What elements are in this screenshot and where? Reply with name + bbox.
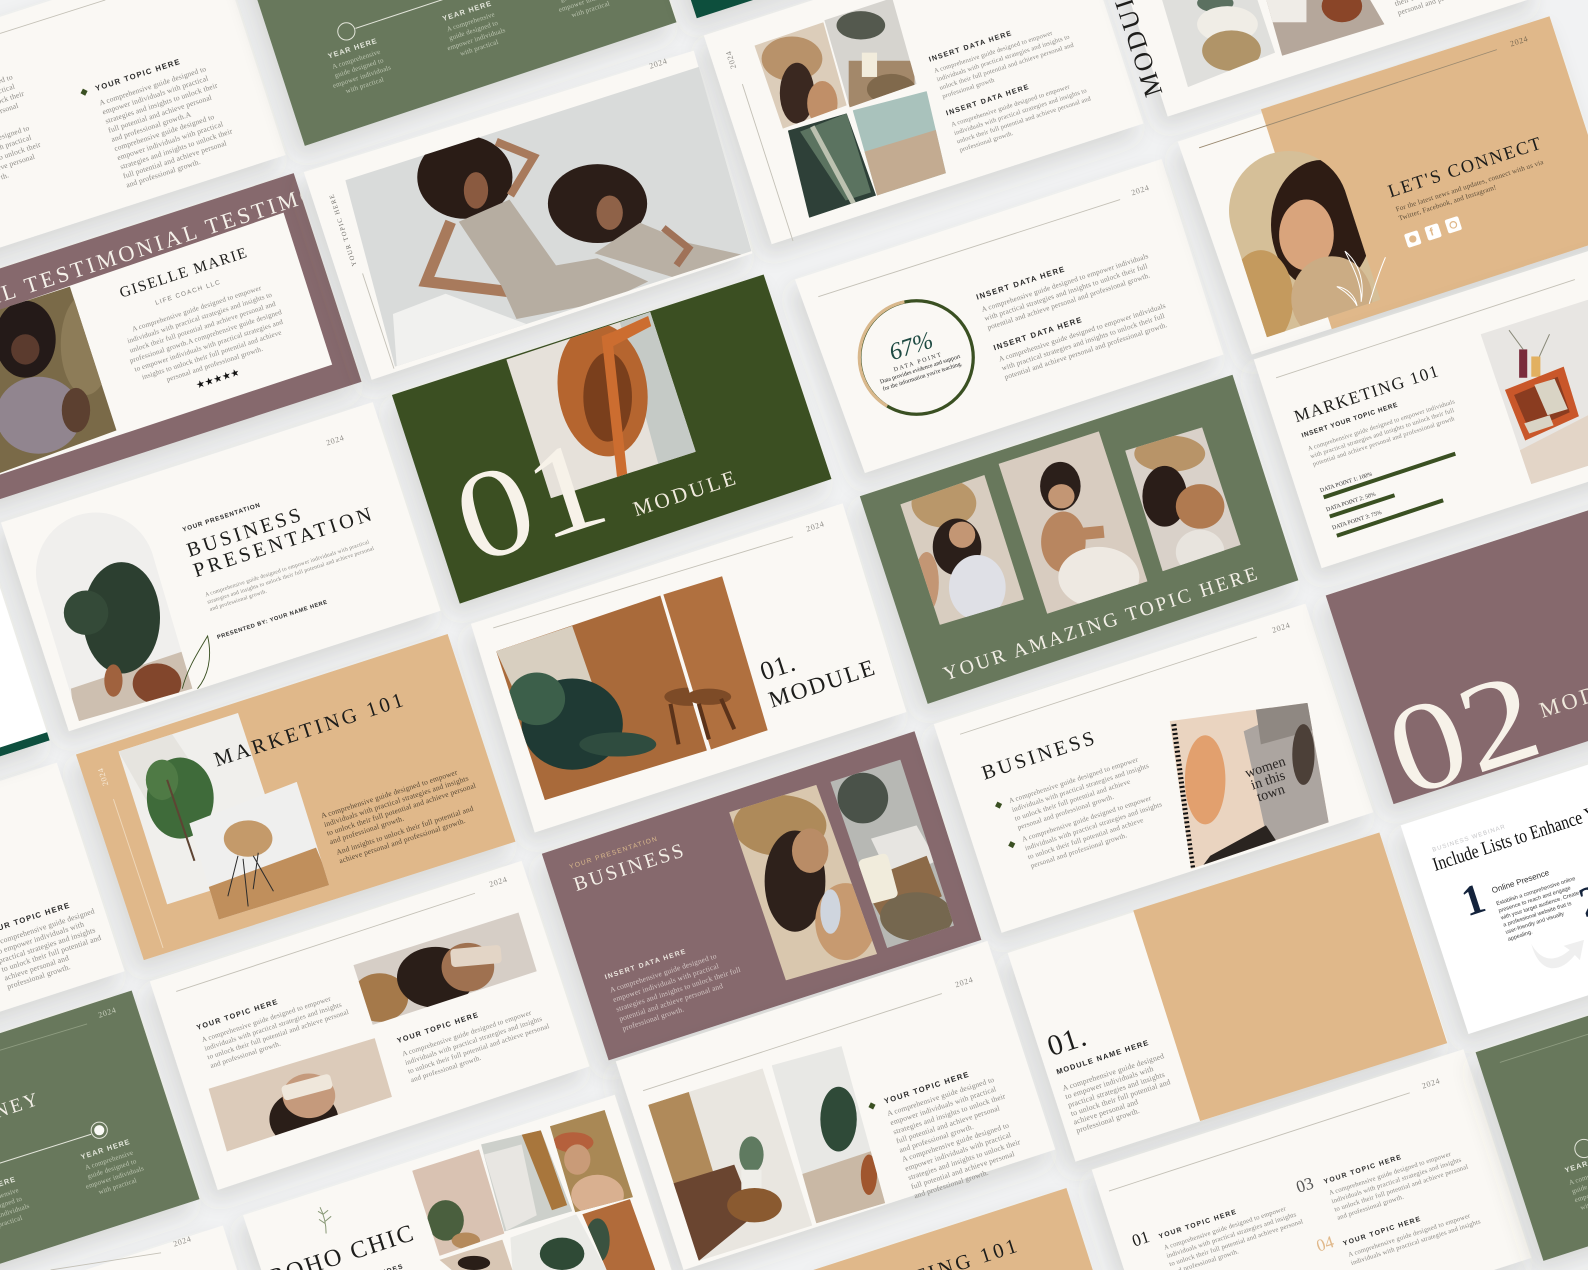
- text block: A comprehensive guide designed to empower: [1347, 1213, 1471, 1259]
- text block: user-friendly and visually: [1505, 911, 1565, 936]
- text block: connect: For the latest news and updates, connect with us via: [1395, 158, 1545, 214]
- subheading: Online Presence: [1491, 868, 1551, 895]
- text block: achieve personal and: [1072, 1097, 1139, 1127]
- timeline node: [1575, 1139, 1588, 1158]
- text block: A comprehensive guide designed to empower: [1163, 1205, 1287, 1252]
- text block: strategies and insights to unlock their: [907, 1137, 1022, 1182]
- text block: year one: empower individuals: [332, 64, 392, 90]
- text block: paragraph one: and professional growth.: [328, 814, 405, 846]
- text block: potential and achieve personal and: [618, 981, 724, 1023]
- text block: individuals with practical strategies and insights: [204, 1001, 343, 1053]
- panel: white slide with teal strip: [0, 532, 50, 861]
- text block: testimonial: professional growth.A comprehensive guide designed: [129, 308, 283, 365]
- text block: practical strategies and insights: [0, 925, 97, 965]
- icon: sprig: [318, 1207, 331, 1234]
- year: 2024: [1130, 183, 1151, 197]
- text block: year: guide designed to: [87, 1158, 138, 1181]
- text block: appealing.: [1507, 929, 1534, 943]
- text block: year two: A comprehensive: [446, 11, 496, 33]
- text block: right column: full potential and achieve personal: [122, 138, 228, 180]
- number 03: 03: [1294, 1173, 1316, 1197]
- title: BUSINESS: [184, 503, 307, 562]
- text block: empower individuals with practical: [612, 961, 720, 1004]
- text block: individuals with practical strategies and insights: [1331, 1156, 1463, 1205]
- text block: testimonial: to empower individuals with practical strategies and: [133, 318, 284, 374]
- heading: number: 01.: [757, 648, 800, 686]
- heading: insert data one: INSERT DATA HERE: [975, 264, 1067, 302]
- text block: data caption: for the information you're teaching.: [882, 360, 964, 393]
- icon: bullet: [868, 1102, 876, 1109]
- heading: insert data two: INSERT DATA HERE: [992, 315, 1084, 352]
- photo: sea: [852, 91, 946, 196]
- presenter: PRESENTED BY: YOUR NAME HERE: [217, 599, 329, 641]
- text block: strategies and insights to unlock their: [892, 1091, 1007, 1136]
- photo: basket plant: [1162, 0, 1275, 87]
- text block: insert data one: A comprehensive guide designed to empower individuals: [981, 252, 1150, 314]
- text block: A comprehensive guide designed to: [901, 1121, 1010, 1164]
- text block: insert data one: potential and achieve personal and professional growth.: [986, 271, 1151, 332]
- panel: four photos slide: [704, 0, 1143, 244]
- photo: rattan chair: [190, 782, 329, 920]
- text block: to unlock their full potential and: [0, 933, 102, 974]
- text block: professional growth.: [1075, 1106, 1141, 1135]
- text block: professional growth.: [6, 962, 72, 991]
- stat: 67 percent: 67%: [886, 327, 937, 366]
- subheading: role: LIFE COACH LLC: [154, 279, 222, 307]
- year: 2024: [648, 56, 669, 71]
- photo: sofa and basket: [643, 1063, 820, 1266]
- text block: A comprehensive guide designed to: [609, 951, 718, 994]
- text block: to unlock their full potential and achieve: [1027, 816, 1145, 861]
- text block: and professional growth.: [1336, 1194, 1405, 1222]
- text block: A comprehensive guide designed to empower: [201, 995, 332, 1044]
- panel: two women slide: [304, 51, 760, 380]
- panel: data point slide: [795, 159, 1223, 473]
- text block: insert data two: with practical strategies and insights to unlock their full: [1001, 312, 1166, 372]
- text block: Establish a comprehensive online: [1496, 876, 1576, 907]
- year: 2024: [954, 975, 974, 989]
- heading: YOUR TOPIC HERE: [1342, 1216, 1422, 1248]
- icon: bullet: [1008, 841, 1015, 848]
- eyebrow: YOUR PRESENTATION: [182, 502, 262, 534]
- text block: individuals with practical strategies and insights: [1011, 762, 1150, 814]
- text block: year one: with practical: [345, 76, 385, 95]
- panel: module 01 slide: [392, 274, 831, 604]
- bar labels: DATA POINT 1: 100%: [1319, 471, 1373, 494]
- text block: right column: and professional growth.A: [110, 109, 193, 144]
- photo: fig plant and stool: [496, 596, 707, 800]
- text block: strategies and insights to unlock their full potential and achieve personal: [206, 545, 375, 606]
- panel: business notebook slide: [934, 604, 1373, 933]
- text block: year: with practical: [98, 1177, 138, 1196]
- text block: year: YEAR HERE: [80, 1137, 131, 1161]
- heading: name: GISELLE MARIE: [118, 244, 250, 302]
- heading: your topic: YOUR TOPIC HERE: [94, 57, 182, 93]
- text block: year one: guide designed to: [334, 57, 385, 80]
- photo: hat on chair: [506, 312, 696, 498]
- book title: town: [1255, 781, 1287, 805]
- panel: tan module name slide: [1008, 832, 1447, 1162]
- photo: tall plant: [768, 1043, 889, 1225]
- panel: numbered topics slide: [1092, 1049, 1531, 1270]
- text block: year two: empower individuals: [447, 27, 507, 52]
- timeline: [338, 0, 451, 40]
- text block: insert data one: professional growth: [941, 77, 996, 100]
- label: module: MODULE: [630, 465, 741, 521]
- text block: A comprehensive guide designed to empower: [1021, 794, 1152, 844]
- heading: marketing 101: MARKETING 101: [1292, 361, 1442, 426]
- text block: achieve personal and: [3, 953, 70, 982]
- photo: candle and tray: [830, 760, 954, 948]
- heading: INSERT DATA HERE: [604, 948, 687, 981]
- text block: insert data one: individuals with practical strategies and insights to: [936, 34, 1071, 83]
- text block: year two: with practical: [459, 39, 499, 58]
- text block: full potential and achieve personal: [910, 1149, 1016, 1191]
- year: 2024: [172, 1234, 193, 1249]
- book title: in this: [1249, 767, 1287, 793]
- number: 01.: [1044, 1020, 1091, 1063]
- text block: individuals with practical strategies and insights: [1350, 1218, 1482, 1267]
- text block: right column: full potential and achieve personal: [107, 93, 213, 135]
- year: 2024: [325, 433, 345, 448]
- number 01: 01: [1130, 1227, 1152, 1251]
- icon: bullet diamond: [81, 89, 88, 96]
- photo: notebook: [1170, 702, 1329, 869]
- text block: personal and professional growth.: [1030, 831, 1128, 870]
- text block: paragraph two: And insights to unlock their full potential and: [335, 804, 475, 857]
- photo: sunglasses close-up one: [354, 912, 536, 1025]
- text block: testimonial: individuals with practical strategies and insights to: [126, 291, 273, 345]
- icon: rating stars: ★★★★★: [195, 367, 241, 392]
- year: 2024: [805, 519, 825, 534]
- text block: paragraph one: A comprehensive guide designed to empower: [320, 768, 458, 820]
- donut chart: [859, 301, 973, 414]
- heading: YOUR TOPIC HERE: [396, 1010, 480, 1045]
- panel: module 02 slide: [1326, 475, 1588, 823]
- text block: right column: empower individuals with practical: [116, 119, 224, 162]
- text block: connect: Twitter, Facebook, and Instagram!: [1398, 183, 1497, 223]
- year: 2024: [97, 1005, 118, 1020]
- panel: bottom left slide: [51, 1225, 237, 1270]
- text block: personal and professional growth.: [1017, 793, 1115, 832]
- text block: insert data two: A comprehensive guide designed to empower: [950, 83, 1071, 128]
- subheading: INSERT YOUR TOPIC HERE: [1301, 402, 1399, 439]
- panel: green timeline slide top: [237, 0, 677, 146]
- text block: a professional website that is: [1503, 901, 1573, 929]
- timeline: [0, 1122, 107, 1165]
- text block: right column: empower individuals with practical: [101, 74, 209, 116]
- text block: and professional growth.: [898, 1122, 975, 1155]
- icon: line leaf: [182, 636, 210, 689]
- text block: with practical strategies and insights to unlock their full: [1309, 407, 1455, 460]
- text block: right column: strategies and insights to unlock their: [104, 81, 219, 126]
- year: 2024: [488, 875, 509, 889]
- photo: orange shelf: [1481, 300, 1588, 484]
- text block: testimonial: unlock their full potential and achieve personal and: [129, 300, 277, 355]
- panel: business presentation slide: [1, 402, 441, 734]
- text block: A comprehensive guide designed to empower individuals with practical: [204, 539, 370, 598]
- text block: right column: and professional growth.: [125, 157, 202, 190]
- text block: to unlock their full potential and achieve personal: [407, 1022, 550, 1076]
- panel: interior room slide: [616, 941, 1055, 1270]
- title: PRESENTATION: [191, 503, 378, 582]
- year: 2024: [724, 50, 738, 70]
- heading: let's connect: LET'S CONNECT: [1386, 132, 1545, 201]
- heading: MODULE NAME HERE: [1055, 1038, 1150, 1076]
- panel: testimonial slide: [0, 159, 384, 502]
- bar labels: DATA POINT 3: 75%: [1332, 510, 1383, 532]
- text block: right column: A comprehensive guide designed to: [98, 64, 207, 107]
- text block: potential and achieve personal and professional growth: [1312, 415, 1456, 468]
- photo: two women: [339, 61, 760, 375]
- text block: testimonial: insights to unlock their full potential and achieve: [141, 329, 283, 381]
- text block: year two: guide designed to: [448, 20, 499, 42]
- text block: empower individuals with practical: [889, 1084, 997, 1127]
- text block: paragraph one: to unlock their full potential and achieve personal: [326, 781, 477, 838]
- photo: woman with hat: [724, 780, 881, 982]
- panel: marketing tan slide: [76, 634, 515, 960]
- photo: potted plant: [118, 713, 265, 904]
- text block: year one: A comprehensive: [331, 49, 381, 71]
- text block: individuals with practical strategies and insights: [404, 1015, 543, 1067]
- photo: sunglasses close-up two: [208, 1038, 392, 1152]
- title: BUSINESS: [571, 839, 689, 896]
- text block: and professional growth.: [209, 1040, 282, 1070]
- photo: terracotta pot: [1266, 0, 1384, 56]
- photo: woman middle: [998, 432, 1148, 614]
- text block: A comprehensive guide designed to empower: [1328, 1151, 1452, 1197]
- year: 2024: [1271, 621, 1291, 635]
- text block: right column: strategies and insights to unlock their: [119, 126, 234, 171]
- text block: insert data two: individuals with practical strategies and insights to: [953, 87, 1088, 137]
- heading: YOUR TOPIC HERE: [1323, 1154, 1403, 1186]
- heading: insert data one: INSERT DATA HERE: [928, 29, 1013, 64]
- title: BUSINESS: [979, 727, 1100, 785]
- text block: presence to reach and engage: [1498, 885, 1572, 914]
- text block: individuals with practical strategies and insights: [1166, 1211, 1298, 1260]
- heading: insert data two: INSERT DATA HERE: [945, 83, 1031, 117]
- photo: plant in arch: [36, 512, 192, 721]
- icons: social: f: [1428, 226, 1436, 239]
- text block: insert data two: A comprehensive guide designed to empower individuals: [998, 302, 1167, 363]
- text block: and professional growth.: [209, 588, 268, 613]
- year: 2024: [1509, 34, 1529, 48]
- text block: to unlock their full potential and achieve personal: [1169, 1218, 1304, 1268]
- text block: to unlock their full potential and achieve personal: [206, 1008, 350, 1061]
- text block: A comprehensive guide designed to empower: [1008, 756, 1139, 805]
- photo: woman in field: [0, 279, 122, 476]
- text block: A comprehensive guide designed to empower individuals: [1307, 398, 1456, 453]
- panel: left topic slide: [0, 763, 125, 1092]
- photo: woman left: [900, 475, 1024, 625]
- text block: insert data two: unlock their full potential and achieve personal and: [956, 95, 1092, 145]
- text block: to empower individuals with: [1064, 1064, 1155, 1101]
- text block: year one: YEAR HERE: [327, 36, 379, 61]
- bar chart: [1324, 454, 1455, 536]
- photo grid: [405, 1106, 658, 1270]
- eyebrow: YOUR PRESENTATION: [569, 836, 659, 871]
- panel: bottom tan slide: [813, 1188, 1093, 1270]
- text block: year three: with practical: [571, 0, 611, 19]
- panel: marketing 101 bars slide: [1254, 239, 1588, 568]
- bar labels: DATA POINT 2: 50%: [1325, 492, 1377, 513]
- text block: paragraph one: individuals with practical strategies and insights: [323, 773, 470, 829]
- heading: YOUR TOPIC HERE: [1158, 1209, 1238, 1241]
- text block: insert data two: potential and achieve personal and professional growth.: [1004, 321, 1168, 381]
- text block: individuals with practical strategies and insights: [1024, 800, 1163, 852]
- text block: A comprehensive guide designed to: [886, 1075, 995, 1118]
- text block: to unlock their full potential and: [1069, 1077, 1172, 1118]
- text block: testimonial: personal and professional growth.: [166, 345, 264, 384]
- text block: practical strategies and insights: [1067, 1070, 1166, 1110]
- year: 2024: [1421, 1076, 1441, 1091]
- big number: 01: [438, 411, 622, 590]
- panel: boho chic slide: [243, 1095, 671, 1270]
- title: YOUR AMAZING TOPIC HERE: [941, 562, 1262, 685]
- text block: year: empower individuals: [85, 1165, 145, 1191]
- big number: 02: [1371, 644, 1555, 823]
- photo: woman in arch: [1229, 151, 1380, 338]
- vertical label: YOUR TOPIC HERE: [328, 192, 358, 267]
- heading: YOUR TOPIC HERE: [883, 1070, 971, 1106]
- number: 1: [1456, 875, 1491, 926]
- panel: module slide top right: [1100, 0, 1539, 116]
- number 04: 04: [1314, 1232, 1337, 1256]
- icons: social: [1404, 216, 1462, 248]
- panel: teal slide sliver: [629, 0, 1068, 18]
- text block: data caption: Data provides evidence and support: [879, 354, 961, 386]
- text block: to unlock their full potential and achieve: [1014, 778, 1131, 823]
- panel: white topic slide top left: [0, 0, 286, 275]
- panel: right green slide: [1476, 932, 1588, 1261]
- card: [0, 213, 332, 478]
- text block: and professional growth.: [913, 1168, 990, 1200]
- text block: A comprehensive guide designed: [1061, 1051, 1165, 1093]
- heading: module: MODULE: [766, 654, 880, 714]
- photo: woman with hat: [754, 22, 846, 128]
- text block: strategies and insights to unlock their full: [615, 965, 742, 1014]
- text block: paragraph two: achieve personal and professional growth.: [338, 816, 467, 865]
- text block: A comprehensive guide designed to empower: [401, 1009, 532, 1058]
- panel: let's connect slide: [1178, 16, 1588, 354]
- panel: green journey slide: [0, 990, 200, 1270]
- photo: woman right: [1125, 428, 1240, 572]
- text block: insert data one: A comprehensive guide designed to empower: [933, 30, 1054, 75]
- icon: bullet: [995, 802, 1002, 809]
- panel: amazing topic green slide: [860, 375, 1298, 704]
- label: data point: DATA POINT: [893, 352, 943, 373]
- text block: insert data one: unlock their full potential and achieve personal and: [939, 41, 1075, 92]
- photo: terracotta panel: [663, 576, 768, 749]
- panel: sunglasses slide: [150, 861, 589, 1190]
- icon: white leaf: [1337, 251, 1385, 306]
- title: MARKETING 101: [211, 689, 409, 771]
- heading: YOUR TOPIC HERE: [195, 997, 280, 1032]
- text block: and professional growth.: [410, 1054, 482, 1084]
- text block: year: A comprehensive: [84, 1150, 134, 1172]
- text block: professional growth.: [621, 1004, 685, 1033]
- text block: insert data two: professional growth.: [959, 130, 1015, 154]
- year: 2024: [96, 767, 110, 787]
- text block: with your target audience. Create: [1499, 891, 1580, 922]
- panel: 01 module photo slide: [471, 503, 906, 832]
- text block: right column: comprehensive guide designed to: [113, 112, 215, 153]
- eyebrow: BUSINESS WEBINAR: [1432, 824, 1507, 854]
- panel: business mauve slide: [542, 731, 981, 1060]
- arrow: [1531, 940, 1584, 968]
- text block: insert data one: with practical strategies and insights to unlock their full: [983, 262, 1149, 323]
- text block: to unlock their full potential and achieve personal: [1334, 1164, 1469, 1214]
- photo: leaf: [788, 114, 876, 218]
- book title: women: [1243, 754, 1288, 782]
- text block: empower individuals with practical: [904, 1130, 1012, 1173]
- panel: webinar white slide: [1401, 705, 1588, 1034]
- text block: testimonial: A comprehensive guide designed to empower: [131, 284, 263, 333]
- text block: full potential and achieve personal: [895, 1103, 1001, 1145]
- bar labels: [1319, 471, 1383, 532]
- photo: candle: [824, 0, 916, 108]
